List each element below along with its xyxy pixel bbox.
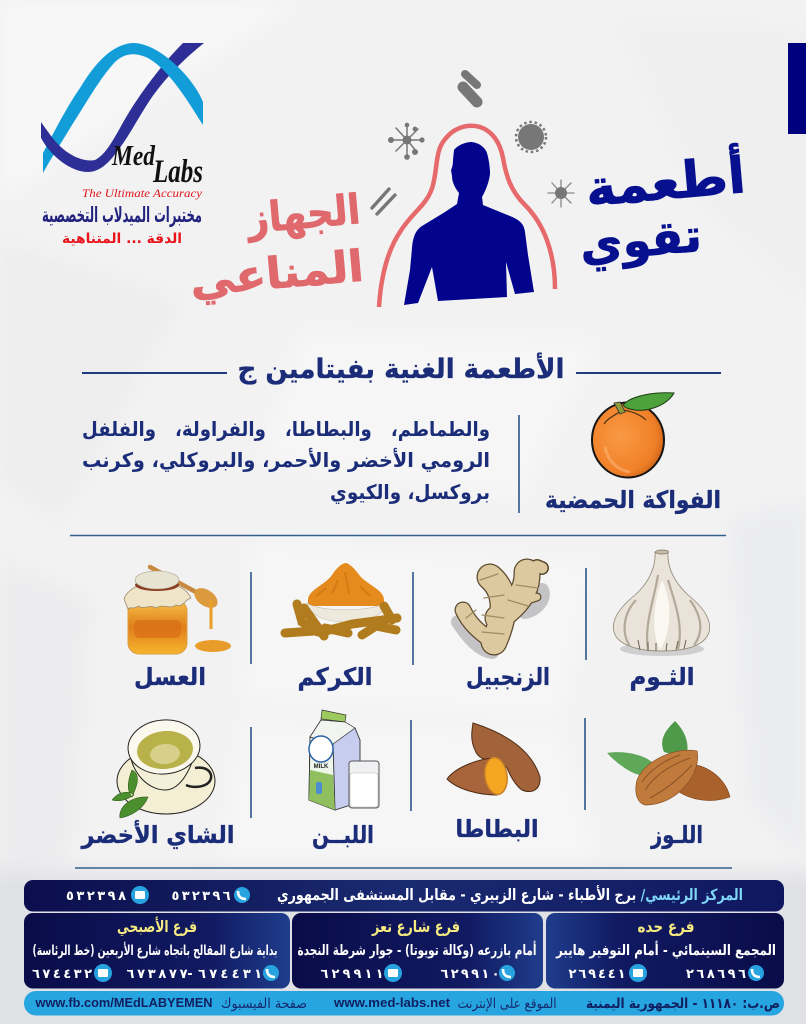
footer: branch Hadda: فرع حده	[638, 917, 694, 936]
text block: vitamin C foods	[82, 417, 490, 505]
divider	[412, 572, 414, 665]
footer: contact bar: صفحة الفيسبوك	[221, 996, 307, 1012]
footer: branch Hadda: ٢٦٨٦٩٦	[686, 967, 746, 982]
labels row two: الشاي الأخضر	[81, 820, 235, 849]
title: immune system (red)	[188, 185, 366, 307]
logo: Med Labs: Labs	[152, 154, 203, 190]
labels row one: الزنجبيل	[466, 663, 550, 691]
icon: ginger	[458, 566, 543, 652]
text block: vitamin C foods: بروكسل، والكيوي	[330, 480, 490, 505]
divider	[250, 727, 252, 818]
icon: sweet potato	[447, 723, 540, 796]
footer: branch Taiz street: أمام بازرعه (وكالة تويوتا) - جوار شرطة النجدة	[298, 941, 536, 959]
footer: main centre bar: ٥٣٢٣٩٨	[66, 889, 126, 904]
footer: main centre bar	[24, 880, 784, 912]
footer: branch Taiz street	[292, 913, 543, 988]
icon: garlic	[613, 550, 710, 656]
icon: orange	[592, 393, 674, 478]
heading: vitamin C: الأطعمة الغنية بفيتامين ج	[238, 352, 564, 385]
title: foods that strengthen (blue): أطعمة	[583, 142, 748, 218]
logo: Med Labs: الدقة ... المتناهية	[62, 231, 182, 247]
logo: Med Labs	[41, 43, 204, 247]
footer: branch Taiz street: ٦٢٩٩١١	[320, 967, 384, 982]
divider	[585, 568, 587, 660]
labels row one: الكركم	[298, 663, 372, 691]
footer: branch Asbahi: -	[187, 967, 193, 982]
title: immune system (red): المناعي	[188, 242, 366, 307]
icon: honey jar	[124, 567, 231, 654]
title: foods that strengthen (blue): تقوي	[577, 208, 704, 272]
footer: branch Taiz street: فرع شارع تعز	[371, 917, 460, 936]
footer: contact bar: الموقع على الإنترنت	[458, 996, 556, 1012]
dark corner block	[788, 43, 806, 134]
labels row two: اللـوز	[650, 821, 703, 849]
footer: branch Hadda	[546, 913, 784, 988]
footer: contact bar: ص.ب: ١١١٨٠ - الجمهورية اليمنية	[586, 996, 780, 1012]
icon: milk carton and glass: MILK	[314, 764, 329, 770]
title: foods that strengthen (blue)	[577, 142, 748, 272]
labels row one: العسل	[134, 663, 206, 691]
icon: almonds	[607, 721, 730, 805]
footer: branch Asbahi: ٦٧٤٤٣٢	[32, 967, 92, 982]
footer: branch Taiz street: ٦٢٩٩١٠	[440, 967, 500, 982]
logo: Med Labs: Med	[111, 140, 155, 172]
icon: turmeric	[285, 563, 397, 636]
logo: Med Labs: مختبرات الميدلاب التخصصية	[42, 203, 202, 227]
divider	[518, 415, 520, 513]
footer: contact bar	[24, 991, 784, 1016]
icon: green tea	[112, 717, 215, 818]
labels row one	[134, 663, 694, 691]
divider	[584, 718, 586, 810]
footer: main centre bar: ٥٣٢٣٩٦	[172, 889, 231, 904]
divider	[250, 572, 252, 664]
labels row two	[81, 815, 703, 849]
labels row one: الثـوم	[630, 663, 694, 691]
label: citrus fruits: الفواكة الحمضية	[545, 486, 721, 514]
footer: branch Asbahi: بداية شارع المقالح باتجاه شارع الأربعين (خط الرئاسة)	[32, 942, 278, 959]
logo: Med Labs: The Ultimate Accuracy	[82, 186, 203, 200]
labels row two: البطاطا	[456, 815, 538, 843]
labels row two: اللبــن	[312, 821, 374, 849]
footer: main centre bar: المركز الرئيسي/ برج الأطباء - شارع الزبيري - مقابل المستشفى الجمهوري	[277, 885, 743, 905]
icon: protective ring	[379, 126, 555, 307]
footer: contact bar: www.med-labs.net	[333, 995, 451, 1010]
text block: vitamin C foods: والطماطم، والبطاطا، والفراولة، والفلفل	[82, 417, 490, 441]
footer: contact bar: www.fb.com/MEdLABYEMEN	[35, 995, 213, 1010]
footer: branch Asbahi: ٦٧٤٤٣١	[198, 967, 262, 982]
divider	[410, 720, 412, 811]
icon: milk carton and glass	[309, 710, 379, 810]
text block: vitamin C foods: الرومي الأخضر والأحمر، والبروكلي، وكرنب	[82, 447, 490, 473]
icon: human silhouette	[404, 142, 534, 305]
footer: branch Asbahi	[24, 913, 290, 988]
footer: branch Asbahi: فرع الأصبحي	[117, 917, 197, 937]
footer: branch Asbahi: ٦٧٣٨٧٧	[126, 967, 188, 982]
icon: germs	[372, 74, 574, 214]
footer: branch Hadda: ٢٦٩٤٤١	[568, 967, 626, 982]
title: immune system (red): الجهاز	[244, 185, 362, 243]
